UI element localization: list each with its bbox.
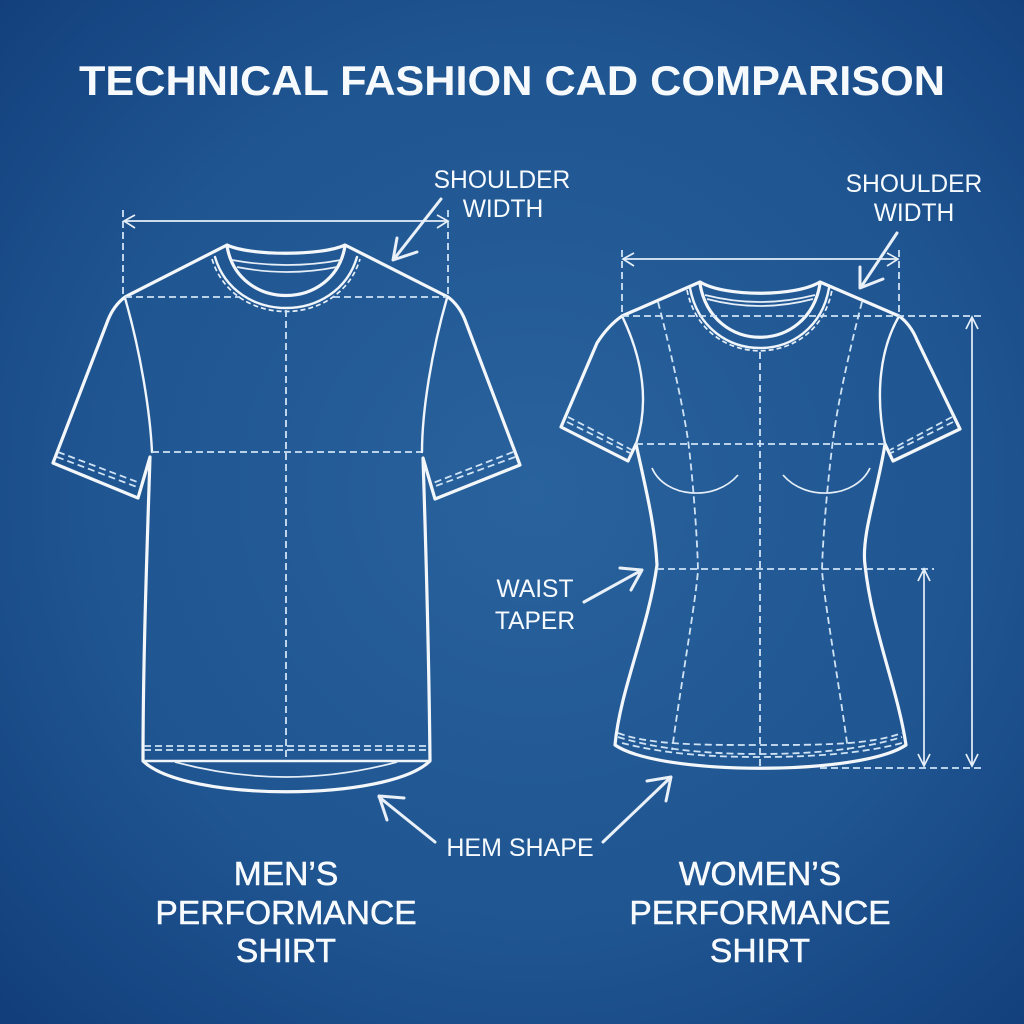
men's shirt drawing (53, 245, 520, 792)
arrow: waist taper (584, 568, 642, 602)
men's shirt caption (155, 856, 417, 970)
waist taper label (495, 576, 575, 635)
men's shoulder width label: SHOULDER (434, 167, 570, 194)
waist taper label: WAIST (497, 576, 573, 603)
men's shoulder width dimension (123, 210, 448, 297)
men's shirt caption: SHIRT (236, 933, 336, 970)
women's shirt drawing (561, 282, 983, 768)
arrow: women's hem (603, 777, 671, 842)
women's length dimensions (820, 317, 983, 768)
women's shoulder width label: SHOULDER (846, 171, 982, 198)
hem shape label: HEM SHAPE (446, 834, 594, 862)
men's shirt caption: MEN’S (234, 856, 338, 893)
arrow: women's shoulder width (860, 233, 897, 288)
men's shoulder width label: WIDTH (463, 196, 543, 223)
women's shirt caption: PERFORMANCE (629, 895, 891, 932)
men's shoulder width label (434, 167, 570, 223)
women's shoulder width label: WIDTH (874, 200, 954, 227)
women's shoulder width dimension (622, 250, 899, 316)
women's shirt caption: SHIRT (710, 933, 810, 970)
women's shirt caption (629, 856, 891, 970)
arrow: men's shoulder width (393, 199, 441, 260)
waist taper label: TAPER (495, 608, 575, 635)
title: TECHNICAL FASHION CAD COMPARISON (79, 57, 945, 104)
women's shoulder width label (846, 171, 982, 227)
women's shirt caption: WOMEN’S (679, 856, 841, 893)
men's shirt caption: PERFORMANCE (155, 895, 417, 932)
arrow: men's hem (379, 796, 435, 842)
